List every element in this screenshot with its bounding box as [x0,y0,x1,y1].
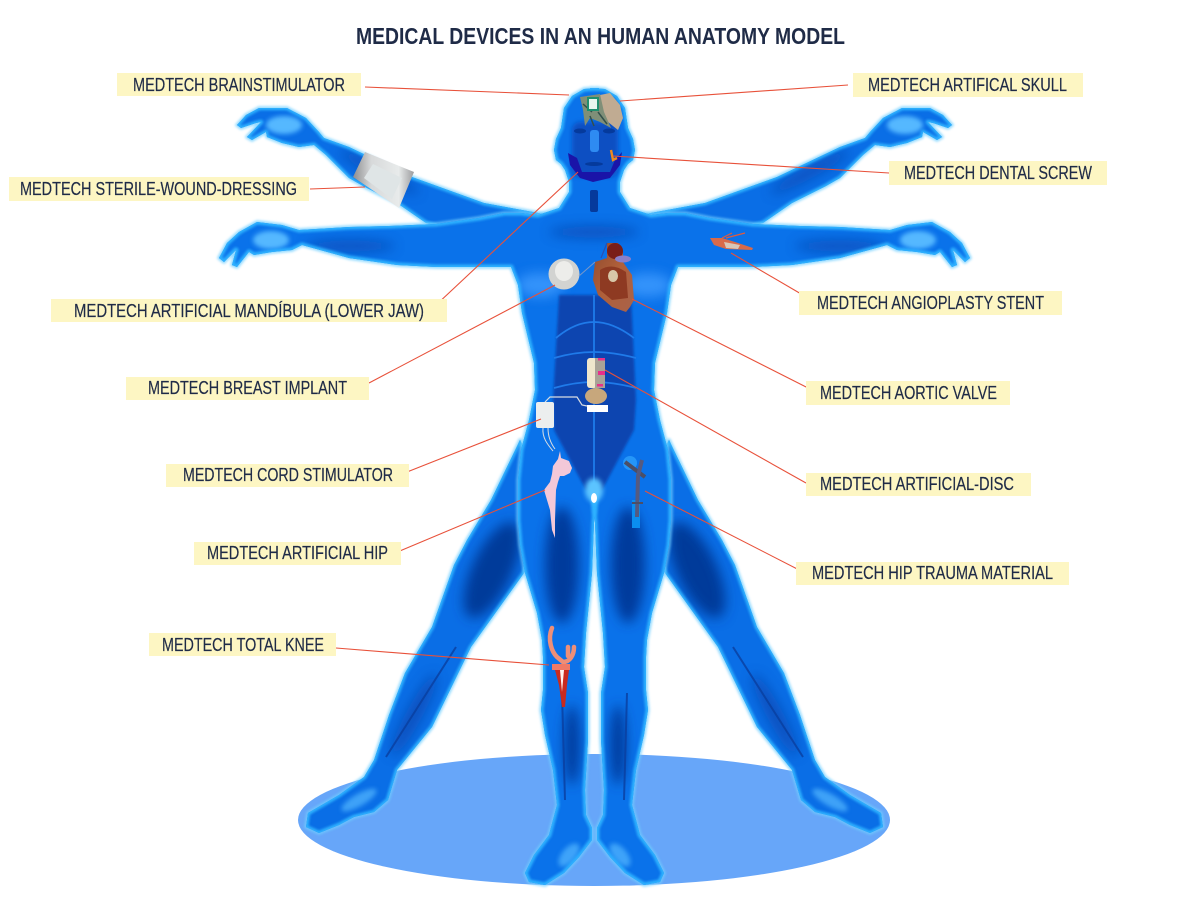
label: artificial mandible: MEDTECH ARTIFICIAL MANDÍBULA (LOWER JAW) [74,301,424,321]
device: angioplasty stent [710,233,753,250]
label: sterile wound dressing: MEDTECH STERILE-WOUND-DRESSING [20,179,297,199]
anatomy figure [219,88,970,885]
device: artificial skull [600,93,623,130]
second pose: raised arms and spread legs [237,108,952,833]
label: brain stimulator: MEDTECH BRAINSTIMULATOR [133,75,345,95]
device: artificial hip [544,451,572,538]
crotch highlight [585,478,603,503]
main pose: body with horizontal arms [219,88,970,885]
title: MEDICAL DEVICES IN AN HUMAN ANATOMY MODEL [356,23,845,49]
device: breast implant [548,258,580,290]
label: hip trauma material: MEDTECH HIP TRAUMA MATERIAL [812,563,1053,583]
label: angioplasty stent: MEDTECH ANGIOPLASTY STENT [817,293,1044,313]
face shading [572,122,618,177]
label: dental screw: MEDTECH DENTAL SCREW [904,163,1092,183]
device: brain stimulator [580,94,611,128]
label: sterile wound dressing [9,177,309,201]
device: artificial disc spine [585,358,608,412]
callout lines [310,85,889,665]
device: dental screw [611,150,617,160]
device: cord stimulator [536,397,587,451]
floor ellipse [298,754,890,886]
label: cord stimulator: MEDTECH CORD STIMULATOR [183,465,393,485]
label: artificial hip: MEDTECH ARTIFICIAL HIP [207,543,388,563]
shoulder and thigh shading [545,507,645,785]
device: hip trauma material [623,456,645,528]
device: total knee [550,628,574,707]
label: aortic valve [806,381,1010,405]
label: aortic valve: MEDTECH AORTIC VALVE [820,383,997,403]
abdominal muscles [553,295,636,490]
label: artificial disc: MEDTECH ARTIFICIAL-DISC [820,474,1014,494]
label: dental screw [889,161,1107,185]
device: artificial mandible [568,152,622,182]
device: aortic valve heart [579,243,634,312]
label: breast implant: MEDTECH BREAST IMPLANT [148,378,347,398]
label: artificial skull: MEDTECH ARTIFICAL SKULL [868,75,1067,95]
label: total knee: MEDTECH TOTAL KNEE [162,635,324,655]
label: angioplasty stent [799,291,1062,315]
device: sterile wound dressing [353,152,414,208]
